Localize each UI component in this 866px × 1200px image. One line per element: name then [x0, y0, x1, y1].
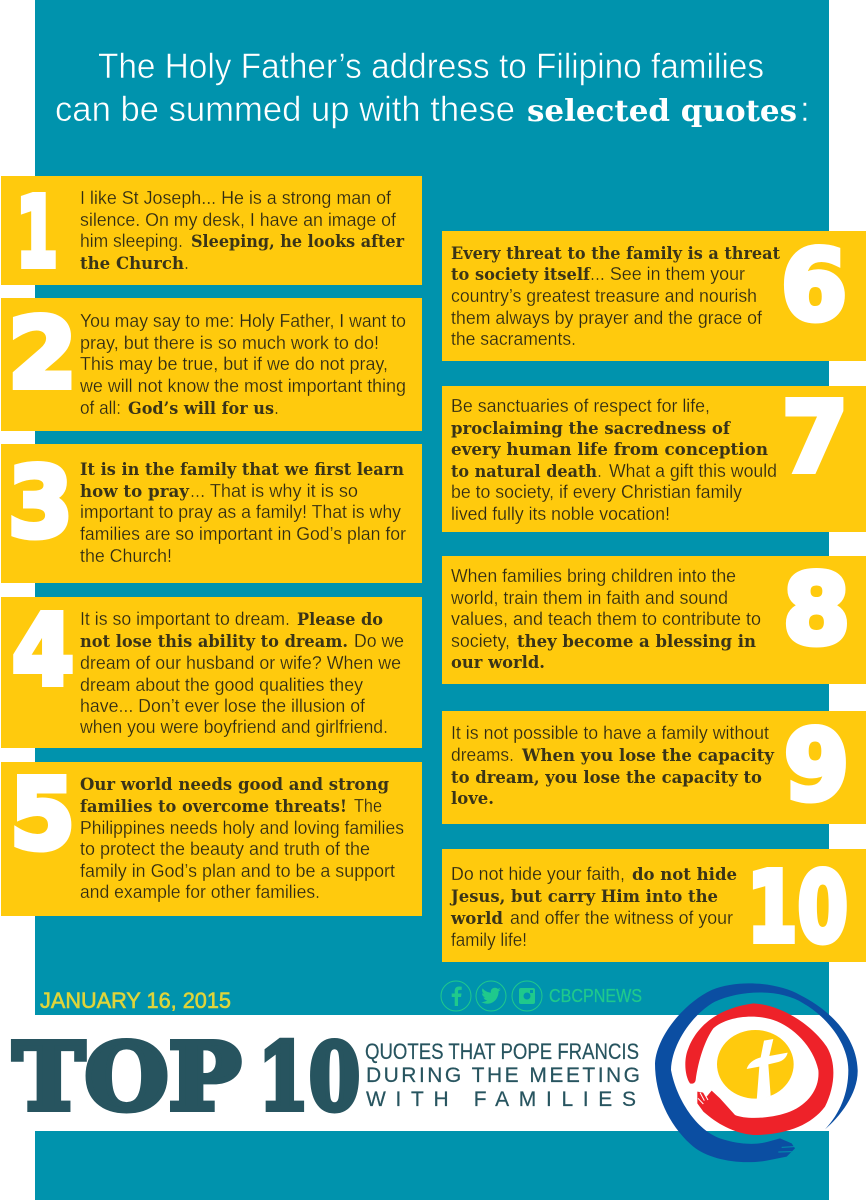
number 8: 8 — [783, 553, 850, 666]
quote text 1: silence. On my desk, I have an image of — [80, 210, 397, 230]
quote text 10: Do not hide your faith, — [451, 864, 625, 884]
panel: quote 4 — [1, 594, 422, 748]
quote text 9: It is not possible to have a family without — [451, 723, 769, 743]
quote text 9: love. — [451, 789, 494, 809]
number 9: 9 — [784, 709, 849, 822]
quote text 4: have... Don’t ever lose the illusion of — [80, 696, 366, 716]
quote text 3: important to pray as a family! That is why — [80, 502, 401, 522]
quote text 4 — [79, 609, 404, 737]
quote text 2: we will not know the most important thing — [79, 376, 406, 396]
quote text 8: values, and teach them to contribute to — [451, 609, 761, 629]
icon: instagram — [512, 981, 542, 1011]
quote text 10 — [449, 864, 737, 950]
subheading: WITH FAMILIES — [366, 1088, 636, 1111]
quote text 1: the Church — [80, 254, 184, 274]
logo red arm — [685, 1003, 833, 1135]
panel background 1 — [1, 176, 422, 285]
quote text 9: When you lose the capacity — [521, 746, 775, 766]
quote text 6: the sacraments. — [451, 329, 576, 349]
heading: top 10: 10 — [258, 1023, 360, 1131]
quote text 7: . — [597, 461, 602, 481]
quote text 8: world, train them in faith and sound — [450, 588, 728, 608]
heading: top 10 — [13, 1023, 360, 1131]
panel background 9 — [442, 711, 866, 824]
panel background 5 — [1, 762, 422, 916]
title — [55, 47, 810, 129]
quote text 7: be to society, if every Christian family — [451, 482, 742, 502]
panel: quote 7 — [442, 381, 866, 532]
quote text 1: . — [184, 253, 189, 273]
quote text 9: to dream, you lose the capacity to — [451, 768, 762, 788]
panel: quote 10 — [442, 849, 866, 964]
quote text 7: to natural death — [451, 462, 597, 482]
quote text 4: It is so important to dream. — [80, 609, 290, 629]
quote text 7 — [451, 396, 777, 524]
quote text 2: pray, but there is so much work to do! — [80, 333, 379, 353]
quote text 7: every human life from conception — [451, 440, 768, 460]
title: : — [800, 90, 810, 129]
quote text 2: You may say to me: Holy Father, I want to — [80, 311, 406, 331]
quote text 3: ... That is why it is so — [190, 481, 358, 501]
number 7: 7 — [782, 381, 848, 494]
panel background 6 — [442, 231, 866, 361]
quote text 4: Do we — [354, 631, 404, 651]
panel: quote 9 — [442, 709, 866, 824]
logo yellow sun — [717, 1030, 794, 1099]
quote text 10: world — [450, 909, 503, 929]
handle text: CBCPNEWS — [549, 986, 642, 1006]
logo white cross — [747, 1039, 788, 1101]
panel: quote 5 — [1, 758, 422, 916]
logo: family embrace with cross — [655, 983, 858, 1162]
quote text 6: country’s greatest treasure and nourish — [451, 286, 757, 306]
title: selected quotes — [527, 94, 797, 129]
panel: quote 3 — [1, 444, 422, 583]
number 2: 2 — [8, 297, 77, 410]
quote text 8: society, — [451, 631, 510, 651]
quote text 1: him sleeping. — [80, 231, 183, 251]
title: can be summed up with these — [55, 90, 515, 129]
panel background 4 — [1, 597, 422, 748]
logo blue hand fingers — [778, 1147, 794, 1152]
logo red hand fingers — [698, 1092, 708, 1104]
panel background 10 — [442, 849, 866, 962]
social media handles — [441, 981, 642, 1011]
quote text 5: families to overcome threats! — [80, 797, 347, 817]
quote text 6 — [451, 244, 780, 349]
quote text 5: to protect the beauty and truth of the — [80, 839, 370, 859]
panel background 7 — [442, 386, 866, 532]
number 5: 5 — [10, 758, 75, 871]
quote text 7: Be sanctuaries of respect for life, — [451, 396, 710, 416]
subheading — [365, 1039, 640, 1111]
quote text 6: them always by prayer and the grace of — [451, 308, 763, 328]
quote text 10: family life! — [451, 930, 527, 950]
quote text 8: they become a blessing in — [517, 632, 756, 652]
number 3: 3 — [8, 446, 73, 559]
quote text 8: our world. — [451, 653, 545, 673]
quote text 1: Sleeping, he looks after — [191, 232, 405, 252]
quote text 2: This may be true, but if we do not pray, — [80, 354, 388, 374]
quote text 3 — [80, 460, 406, 566]
subheading: DURING THE MEETING — [366, 1064, 640, 1087]
number 6: 6 — [781, 229, 847, 342]
panel: quote 8 — [442, 553, 866, 684]
panel: quote 6 — [442, 229, 866, 361]
quote text 4: dream of our husband or wife? When we — [80, 653, 401, 673]
white banner — [0, 1015, 866, 1131]
number 4: 4 — [12, 594, 74, 707]
quote text 2 — [79, 311, 406, 419]
quote text 7: proclaiming the sacredness of — [451, 419, 732, 439]
heading: top 10: TOP — [13, 1023, 241, 1131]
quote text 8: When families bring children into the — [451, 566, 736, 586]
quote text 6: ... See in them your — [590, 264, 745, 284]
quote text 10: do not hide — [632, 865, 737, 885]
quote text 5: Philippines needs holy and loving families — [80, 818, 404, 838]
quote text 4: not lose this ability to dream. — [80, 632, 348, 652]
quote text 5: and example for other families. — [80, 882, 320, 902]
quote text 10: Jesus, but carry Him into the — [449, 887, 718, 907]
quote text 3: how to pray — [80, 482, 190, 502]
title: The Holy Father’s address to Filipino families — [98, 47, 764, 86]
quote text 4: Please do — [297, 610, 383, 630]
panel background 8 — [442, 556, 866, 684]
quote text 9 — [451, 723, 775, 809]
icon: twitter — [476, 981, 506, 1011]
icon: facebook — [441, 981, 471, 1011]
quote text 7: lived fully its noble vocation! — [451, 504, 670, 524]
quote text 10: and offer the witness of your — [510, 908, 733, 928]
number 1: 1 — [16, 176, 58, 289]
quote text 1: I like St Joseph... He is a strong man of — [80, 188, 392, 208]
quote text 6: to society itself — [451, 265, 592, 285]
quote text 4: dream about the good qualities they — [80, 675, 363, 695]
quote text 5: The — [354, 796, 382, 816]
quote text 2: God’s will for us — [128, 399, 274, 419]
quote text 7: What a gift this would — [609, 461, 777, 481]
quote text 6: Every threat to the family is a threat — [451, 244, 780, 264]
quote text 8 — [450, 566, 761, 673]
quote text 5: family in God’s plan and to be a support — [80, 861, 395, 881]
panel background 2 — [1, 298, 422, 431]
panel background 3 — [1, 444, 422, 583]
quote text 2: of all: — [80, 398, 121, 418]
quote text 3: families are so important in God’s plan for — [80, 524, 406, 544]
quote text 5: Our world needs good and strong — [80, 775, 389, 795]
quote text 4: when you were boyfriend and girlfriend. — [79, 717, 388, 737]
subheading: QUOTES THAT POPE FRANCIS — [365, 1039, 639, 1064]
quote text 5 — [80, 775, 404, 902]
quote text 1 — [80, 188, 405, 274]
panel: quote 2 — [1, 297, 422, 431]
quote text 3: It is in the family that we first learn — [80, 460, 404, 480]
quote text 2: . — [274, 398, 279, 418]
panel: quote 1 — [1, 176, 422, 289]
quote text 9: dreams. — [451, 745, 514, 765]
quote text 3: the Church! — [80, 546, 172, 566]
logo blue arm — [655, 983, 858, 1162]
date: JANUARY 16, 2015 — [40, 988, 231, 1013]
